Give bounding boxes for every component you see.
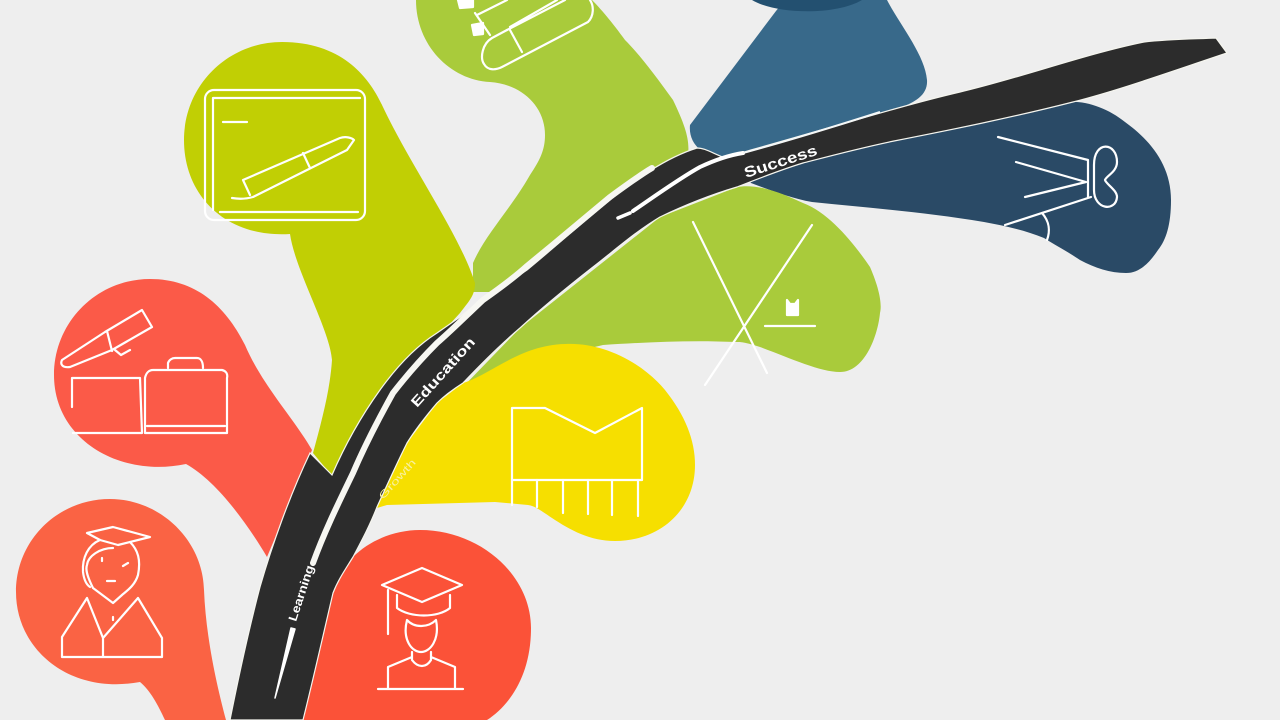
road stripe upper — [633, 153, 743, 211]
panel: red middle pin — [54, 279, 312, 557]
road stripe bottom — [275, 628, 295, 698]
road label upper: Success — [742, 142, 820, 182]
panel: lime pin — [184, 42, 475, 476]
road label on yellow: Growth — [377, 457, 419, 502]
panel: yellow pin — [377, 344, 695, 541]
road edge highlight — [743, 112, 880, 153]
icon: graduate with cap — [378, 568, 463, 689]
panel: red bottom-left pin — [16, 499, 226, 720]
icon: crossed lines — [693, 222, 815, 385]
panel: teal top pin — [690, 0, 927, 158]
road stripe lower — [313, 168, 652, 563]
panel: green top pin — [416, 0, 688, 292]
icon: green books — [458, 0, 593, 69]
road label lower: Learning — [286, 563, 317, 623]
panel: green lower pin — [460, 186, 881, 390]
panel: navy pin — [740, 102, 1171, 273]
icon: pen on board — [205, 90, 365, 220]
icon: graduate figure — [62, 527, 162, 657]
icon: yellow chart — [512, 408, 642, 516]
road — [230, 38, 1227, 720]
icon: diploma and briefcase — [61, 310, 227, 433]
panel: red bottom center pin — [303, 530, 531, 720]
road stripe dash — [618, 213, 630, 218]
road label middle: Education — [407, 334, 478, 410]
icon: navy telescope — [998, 137, 1117, 240]
